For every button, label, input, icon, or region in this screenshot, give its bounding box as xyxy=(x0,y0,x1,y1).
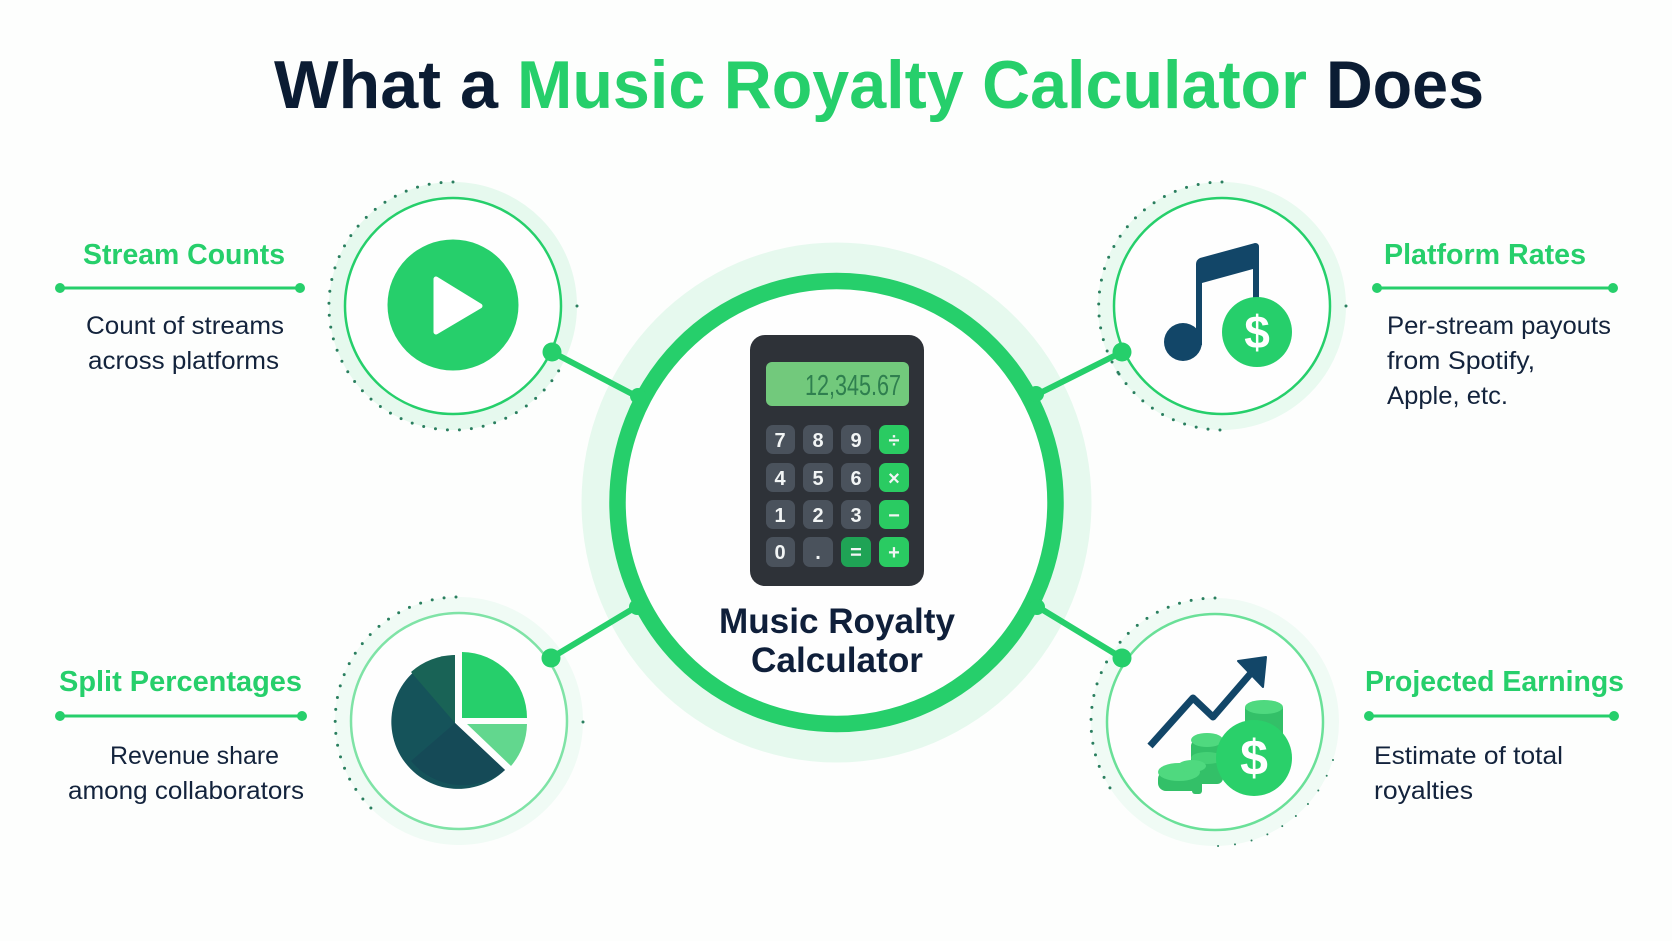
connector lines xyxy=(551,352,1122,658)
calculator keys: 1 xyxy=(774,505,786,527)
calculator keys: = xyxy=(850,542,862,564)
callout: projected earnings: Projected Earnings xyxy=(1365,666,1624,698)
title xyxy=(274,47,1484,123)
panel: split percentages circle xyxy=(335,597,584,837)
hub label: Calculator xyxy=(751,641,923,680)
money bag: $ xyxy=(1240,730,1268,786)
money bag xyxy=(1216,720,1292,796)
callout: projected earnings xyxy=(1364,666,1624,805)
callout: projected earnings: Estimate of total xyxy=(1374,742,1563,770)
calculator keys xyxy=(766,425,909,567)
callout: stream counts: Stream Counts xyxy=(83,239,285,271)
callout: split percentages: among collaborators xyxy=(68,777,304,805)
callout: stream counts xyxy=(55,239,305,375)
calculator keys: 5 xyxy=(812,468,824,490)
callout: split percentages xyxy=(55,666,307,805)
growth arrow xyxy=(1150,657,1266,746)
calculator keys: + xyxy=(888,542,900,564)
icon: growth arrow with coins and money bag xyxy=(1150,657,1292,796)
icon: music note with dollar coin xyxy=(1164,243,1292,367)
calculator keys: ÷ xyxy=(889,430,900,452)
calculator keys: 2 xyxy=(812,505,824,527)
hub label: Music Royalty xyxy=(719,602,956,641)
callout: projected earnings: royalties xyxy=(1374,777,1473,805)
calculator keys: 9 xyxy=(850,430,862,452)
calculator keys: × xyxy=(888,468,900,490)
callout: platform rates: Per-stream payouts xyxy=(1387,312,1611,340)
callout: stream counts: Count of streams xyxy=(86,312,284,340)
hub label xyxy=(719,602,956,680)
callout: stream counts: across platforms xyxy=(88,347,279,375)
panel: platform rates circle xyxy=(1099,182,1348,430)
panel: projected earnings circle xyxy=(1091,598,1333,846)
panel: stream counts circle xyxy=(329,182,578,430)
calculator keys: 6 xyxy=(850,468,862,490)
calculator display xyxy=(766,362,909,406)
callout: split percentages: Split Percentages xyxy=(59,666,302,698)
title: Music Royalty Calculator xyxy=(517,47,1307,123)
calculator keys: 7 xyxy=(774,430,786,452)
pie chart xyxy=(391,652,527,789)
calculator keys: − xyxy=(888,505,900,527)
central hub xyxy=(582,242,1092,762)
calculator keys: 8 xyxy=(812,430,824,452)
callout: platform rates: from Spotify, xyxy=(1387,347,1535,375)
callout: platform rates: Platform Rates xyxy=(1384,239,1586,271)
calculator keys: 4 xyxy=(774,468,786,490)
calculator display: 12,345.67 xyxy=(805,370,901,402)
icon: calculator xyxy=(750,335,924,586)
callout: platform rates: Apple, etc. xyxy=(1387,382,1508,410)
icon: music note with dollar coin: $ xyxy=(1244,306,1270,358)
title: Does xyxy=(1326,47,1484,123)
connector nodes xyxy=(542,342,1132,668)
callout: platform rates xyxy=(1372,239,1618,410)
calculator keys: 3 xyxy=(850,505,862,527)
coin stacks xyxy=(1158,700,1283,794)
calculator keys: 0 xyxy=(774,542,786,564)
callout: split percentages: Revenue share xyxy=(110,742,279,770)
title: What a xyxy=(274,47,499,123)
hub halo and ring xyxy=(582,242,1092,762)
icon: play button xyxy=(388,240,518,370)
calculator keys: . xyxy=(815,542,821,564)
